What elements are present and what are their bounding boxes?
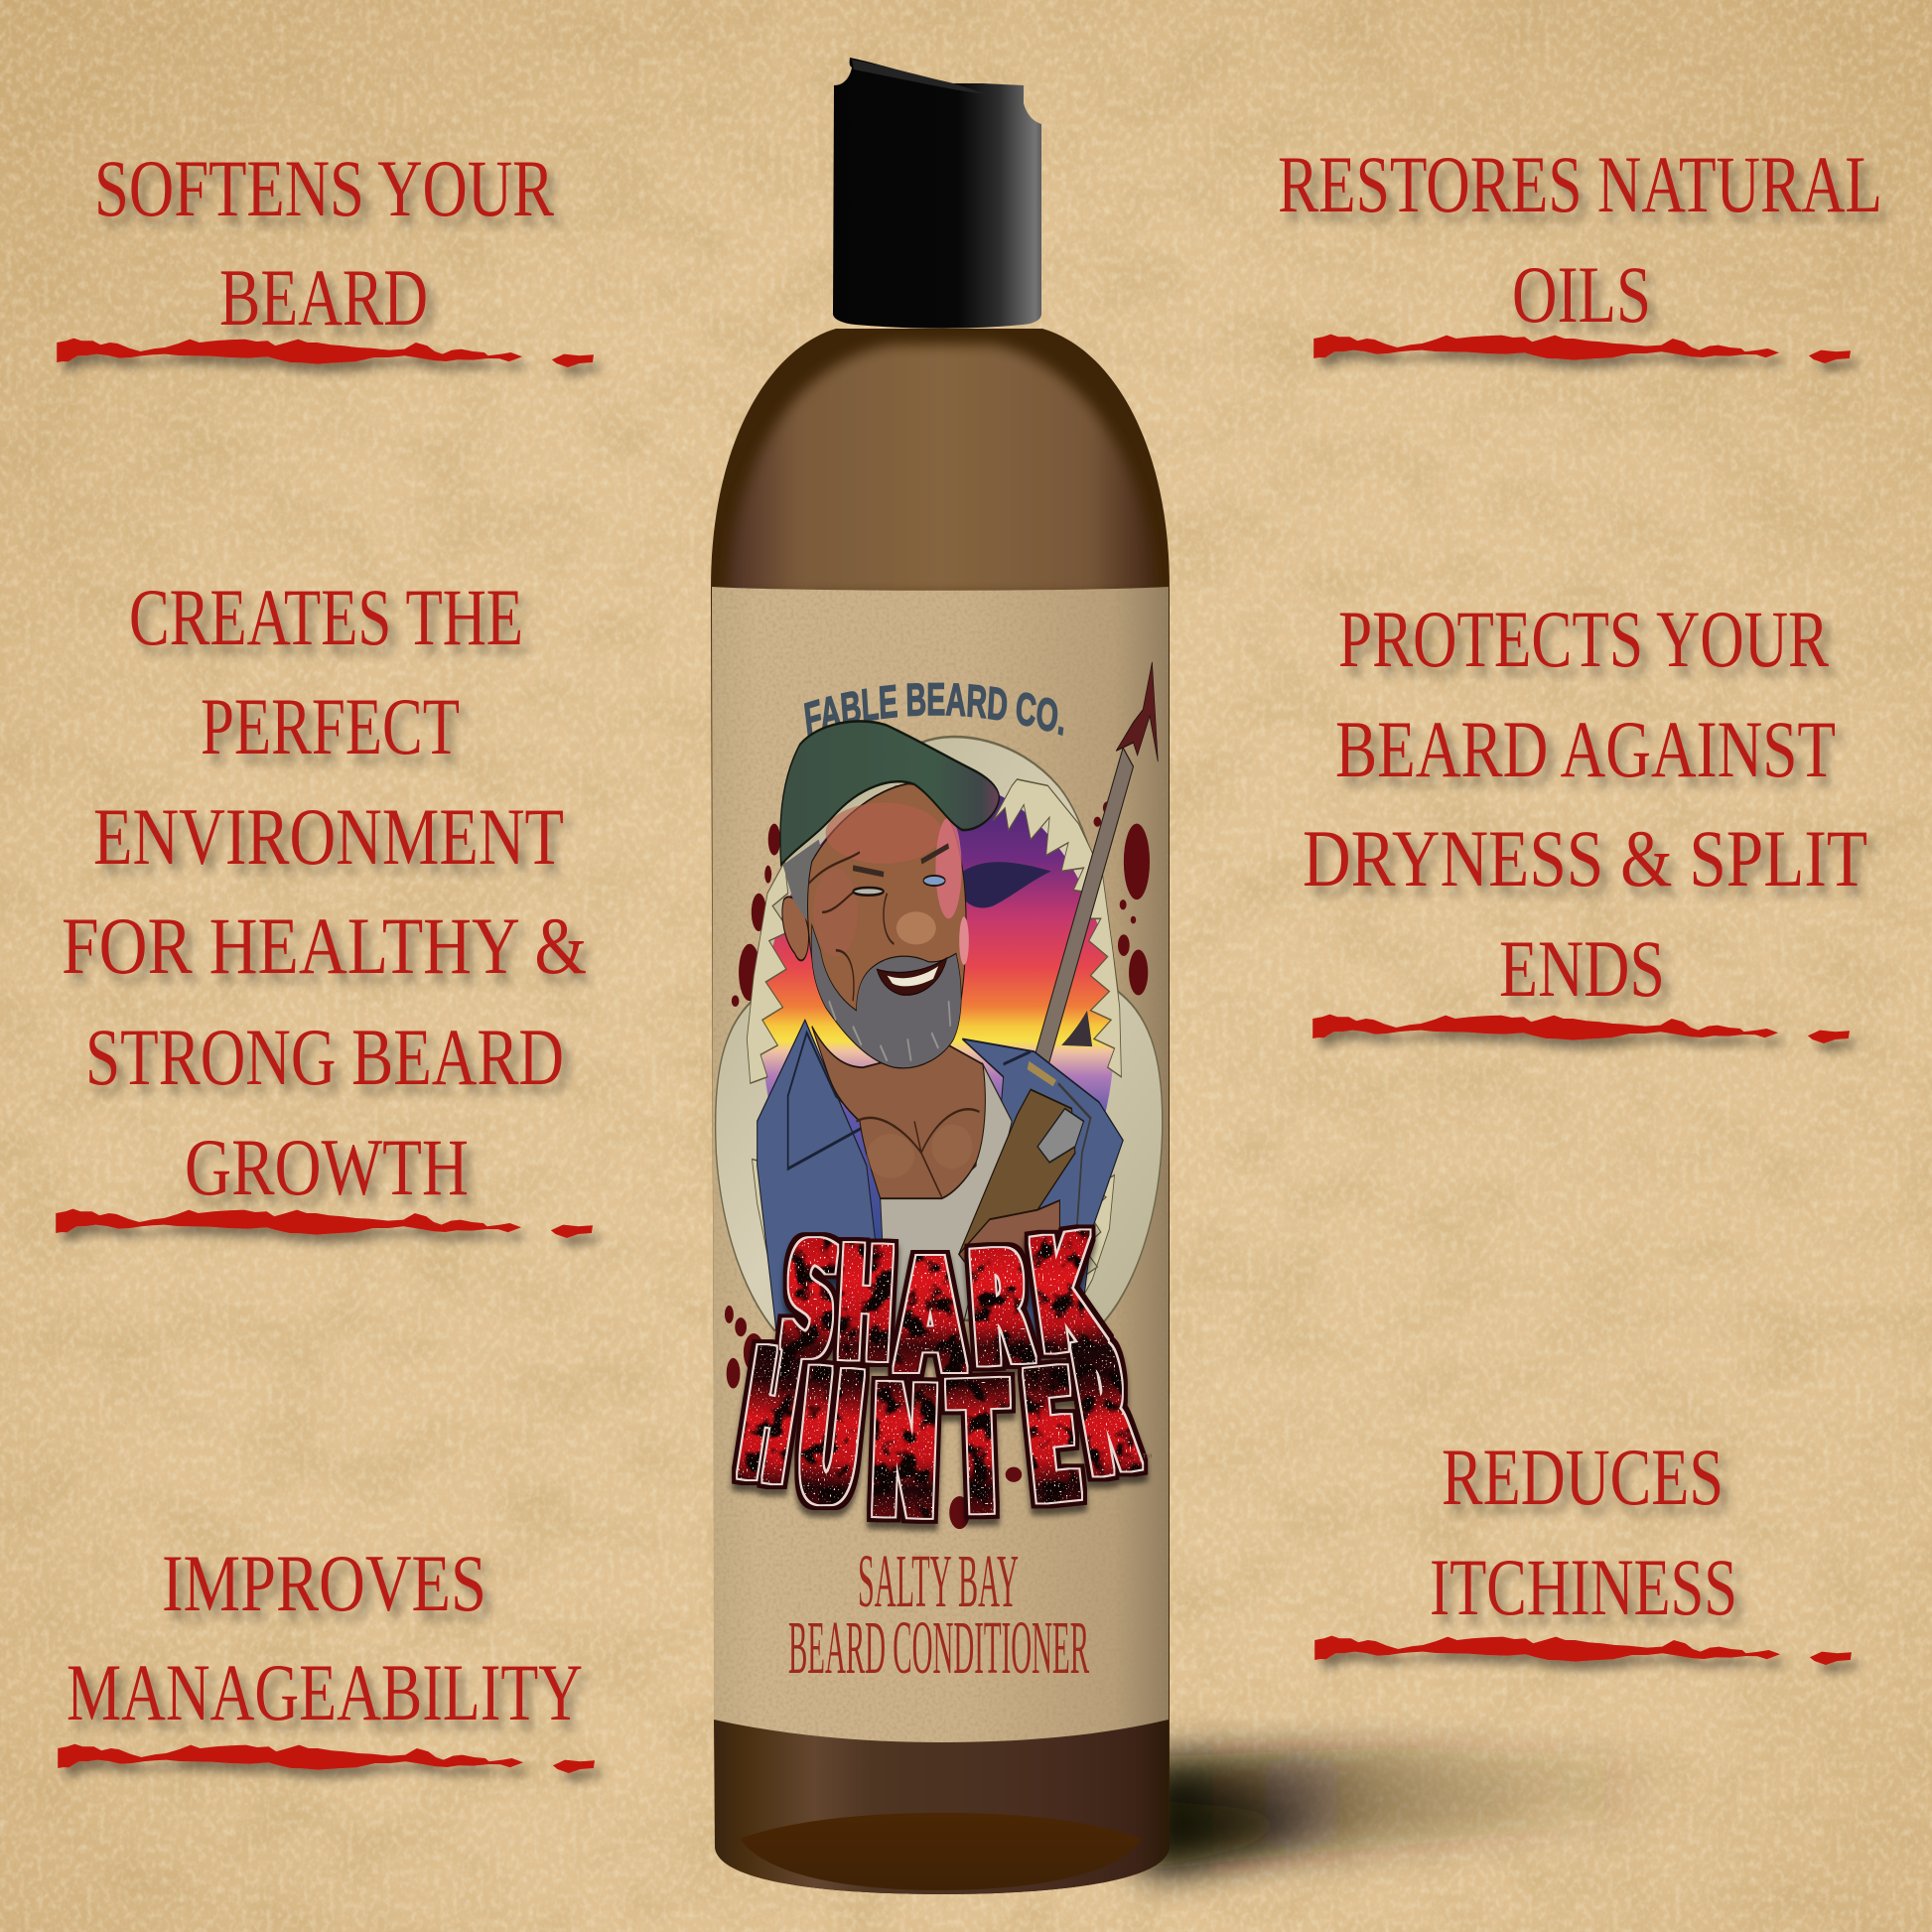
shark fin bbox=[1061, 1011, 1092, 1046]
undershirt bbox=[881, 1064, 1012, 1343]
left benefit: creates the perfect environment: FOR HEALTHY & bbox=[62, 900, 587, 991]
ear bbox=[782, 897, 809, 960]
bottle: R bbox=[1063, 1305, 1147, 1517]
bottle cast shadow bbox=[1142, 1747, 1668, 1871]
right benefit: reduces itchiness: REDUCES bbox=[1442, 1432, 1724, 1522]
right benefit: restores natural oils: OILS bbox=[1512, 249, 1651, 340]
text: BEARD CONDITIONER bbox=[788, 1606, 1089, 1690]
shirt collar folds bbox=[788, 1033, 1031, 1169]
left benefit: softens your beard: BEARD bbox=[219, 252, 428, 343]
right benefit: protects your beard bbox=[1303, 594, 1867, 1043]
product name: Salty Bay Beard Conditioner bbox=[788, 1540, 1089, 1690]
dispenser cap bbox=[833, 58, 1041, 329]
bottle base section bbox=[714, 1720, 1170, 1894]
bottle body: amber glass bbox=[711, 329, 1170, 1894]
blue shirt bbox=[758, 1020, 1123, 1343]
shark jaw bbox=[716, 737, 1163, 1330]
left benefit: softens your beard bbox=[57, 143, 594, 367]
logo word: Shark: A bbox=[897, 1227, 963, 1407]
face bbox=[808, 783, 966, 1065]
logo word: Hunter: E bbox=[1018, 1332, 1087, 1544]
logo word: Shark: S bbox=[774, 1209, 846, 1393]
product name: Salty Bay Beard Conditioner: SALTY BAY bbox=[858, 1540, 1019, 1623]
left benefit: improves manageability: MANAGEABILITY bbox=[67, 1647, 583, 1737]
left benefit: creates the perfect environment: GROWTH bbox=[185, 1122, 469, 1212]
logo word: Hunter bbox=[730, 1305, 1147, 1559]
right benefit: reduces itchiness: ITCHINESS bbox=[1430, 1542, 1737, 1632]
logo word: Shark bbox=[774, 1201, 1109, 1407]
green cap bbox=[780, 721, 999, 865]
logo word: Shark: R bbox=[965, 1217, 1035, 1401]
blood splatter bbox=[725, 801, 1150, 1529]
label illustration: shark jaw, sunset and fisherman bbox=[716, 662, 1163, 1529]
right benefit: restores natural oils bbox=[1278, 139, 1882, 363]
left benefit: softens your beard: SOFTENS YOUR bbox=[94, 143, 554, 233]
mouth and teeth bbox=[877, 958, 947, 995]
left benefit: improves manageability: IMPROVES bbox=[162, 1538, 486, 1628]
brand name: Fable Beard Co.: FABLE BEARD CO. bbox=[804, 683, 1064, 737]
harpoon shaft and barb bbox=[1035, 662, 1158, 1067]
left benefit: creates the perfect environment: ENVIRONMENT bbox=[93, 791, 564, 882]
left benefit: creates the perfect environment: CREATES THE bbox=[129, 572, 523, 662]
beard and moustache bbox=[811, 925, 961, 1068]
dark cloud bbox=[959, 862, 1051, 907]
left benefit: creates the perfect environment: PERFECT bbox=[201, 681, 460, 771]
logo word: Hunter: H bbox=[730, 1312, 808, 1524]
logo word: Hunter: N bbox=[868, 1349, 941, 1559]
right benefit: protects your beard: ENDS bbox=[1499, 923, 1665, 1014]
trademark mark: ™ bbox=[1142, 1452, 1153, 1464]
logo word: Shark: K bbox=[1023, 1201, 1109, 1388]
neck and chest bbox=[812, 1027, 985, 1198]
jaw teeth bbox=[747, 779, 1121, 1305]
hair bbox=[782, 782, 935, 931]
bottle bbox=[711, 58, 1170, 1894]
harpoon gun stock bbox=[959, 1061, 1090, 1254]
hand bbox=[959, 1200, 1059, 1286]
paper label bbox=[712, 587, 1169, 1742]
logo word: Shark: H bbox=[835, 1214, 896, 1396]
face shading bbox=[808, 803, 969, 1001]
eyes and nose bbox=[853, 846, 949, 944]
right benefit: reduces itchiness bbox=[1314, 1432, 1852, 1665]
Shark Hunter logo bbox=[730, 1201, 1147, 1559]
left benefit: creates the perfect environment: STRONG BEARD bbox=[85, 1012, 564, 1102]
logo word: Hunter: T bbox=[948, 1345, 1012, 1555]
sunset sky bbox=[762, 779, 1115, 1286]
logo word: Hunter: U bbox=[789, 1332, 870, 1545]
left benefit: improves manageability bbox=[58, 1538, 595, 1773]
left benefit: creates the perfect environment bbox=[56, 572, 593, 1238]
